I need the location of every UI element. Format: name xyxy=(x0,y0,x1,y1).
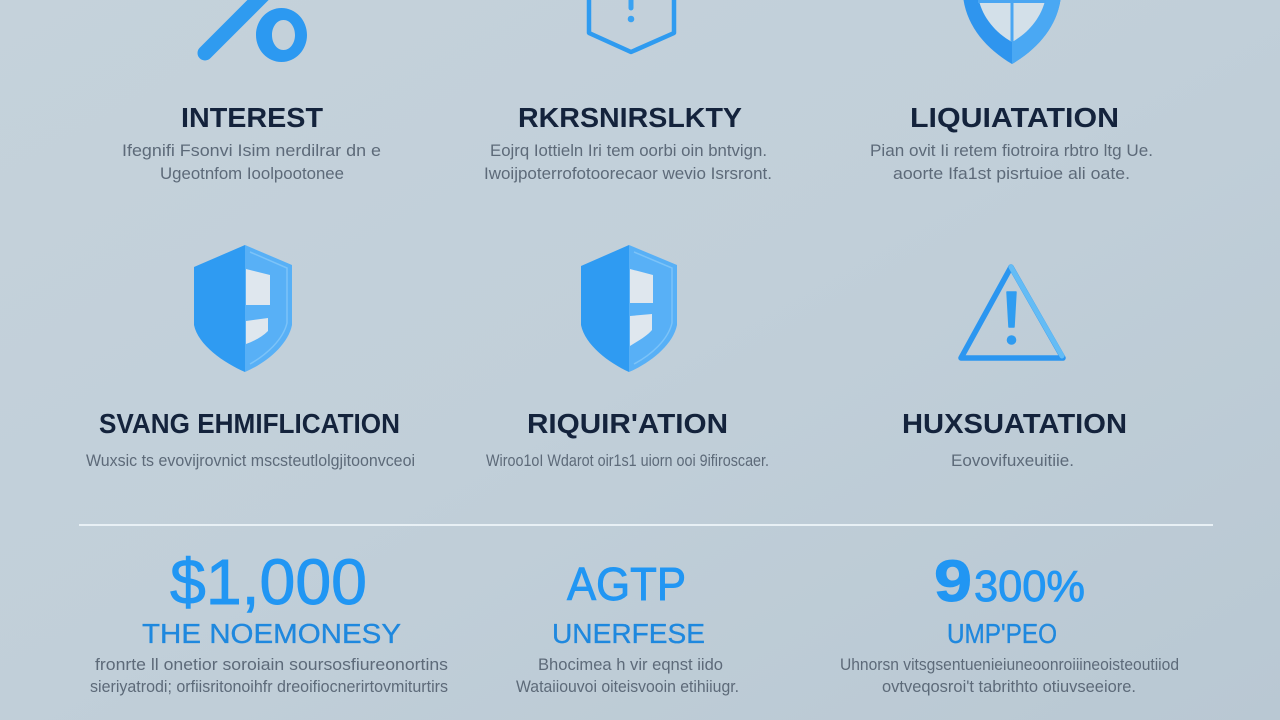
heading: interest: INTEREST xyxy=(181,102,323,133)
icon: warning triangle xyxy=(961,267,1063,358)
panel: stat one xyxy=(90,546,448,696)
number: stat three value: 9 xyxy=(934,549,972,614)
text block: risk security description: Eojrq Iottieln Iri tem oorbi oin bntvign. xyxy=(490,141,767,160)
label: stat three: UMP'PEO xyxy=(947,618,1057,649)
text block: stat one description: fronrte ll onetior soroiain soursosfiureonortins xyxy=(95,655,448,674)
text block: stat three description: Uhnorsn vitsgsentuenieiuneoonroiiineoisteoutiiod xyxy=(840,655,1179,674)
text block: fluctuation description: Eovovifuxeuitiie. xyxy=(951,451,1074,470)
icon: hexagon warning xyxy=(589,0,674,52)
number: stat three value xyxy=(934,549,1085,614)
text block: interest description: Ugeotnfom Ioolpootonee xyxy=(160,164,344,183)
number: stat three value: 300% xyxy=(974,562,1085,611)
panel: stat three xyxy=(840,549,1179,696)
heading: requirement: RIQUIR'ATION xyxy=(527,408,728,439)
panel: liquidation xyxy=(870,0,1153,183)
text block: stat three description: ovtveqosroi't tabrithto otiuvseeiore. xyxy=(882,677,1136,696)
text block: stat two description: Wataiiouvoi oiteisvooin etihiiugr. xyxy=(516,677,739,696)
text block: stat one description: sieriyatrodi; orfiisritonoihfr dreoifiocnerirtovmiturtirs xyxy=(90,677,448,696)
text block: stat three description xyxy=(840,655,1179,696)
icon: split shield centre xyxy=(581,245,677,372)
panel: savings simplification xyxy=(86,245,415,470)
label: stat one: THE NOEMONESY xyxy=(142,618,401,649)
panel: risk security xyxy=(484,0,772,183)
number: stat two value: AGTP xyxy=(567,558,686,610)
panel: fluctuation xyxy=(902,267,1127,470)
heading: savings simplification: SVANG EHMIFLICATION xyxy=(99,408,400,439)
panel: requirement xyxy=(486,245,769,470)
panel: interest xyxy=(122,0,381,183)
text block: interest description: Ifegnifi Fsonvi Isim nerdilrar dn e xyxy=(122,141,381,160)
text block: requirement description: Wiroo1oI Wdarot oir1s1 uiorn ooi 9ifiroscaer. xyxy=(486,451,769,470)
panel: stat two xyxy=(516,558,739,696)
text block: interest description xyxy=(122,141,381,183)
icon: percent sign xyxy=(205,0,307,62)
text block: liquidation description: aoorte Ifa1st pisrtuioe ali oate. xyxy=(893,164,1130,183)
text block: savings description: Wuxsic ts evovijrovnict mscsteutlolgjitoonvceoi xyxy=(86,451,415,470)
heading: fluctuation: HUXSUATATION xyxy=(902,408,1127,439)
icon: split shield left xyxy=(194,245,292,372)
text block: stat two description: Bhocimea h vir eqnst iido xyxy=(538,655,723,674)
text block: liquidation description: Pian ovit Ii retem fiotroira rbtro ltg Ue. xyxy=(870,141,1153,160)
heading: risk security: RKRSNIRSLKTY xyxy=(518,102,742,133)
label: stat two: UNERFESE xyxy=(552,618,705,649)
text block: stat one description xyxy=(90,655,448,696)
text block: risk security description: Iwoijpoterrofotoorecaor wevio Isrsront. xyxy=(484,164,772,183)
text block: liquidation description xyxy=(870,141,1153,183)
text block: risk security description xyxy=(484,141,772,183)
heading: liquidation: LIQUIATATION xyxy=(910,102,1119,133)
number: one thousand dollars: $1,000 xyxy=(170,546,367,618)
text block: stat two description xyxy=(516,655,739,696)
icon: shield top xyxy=(963,0,1061,64)
